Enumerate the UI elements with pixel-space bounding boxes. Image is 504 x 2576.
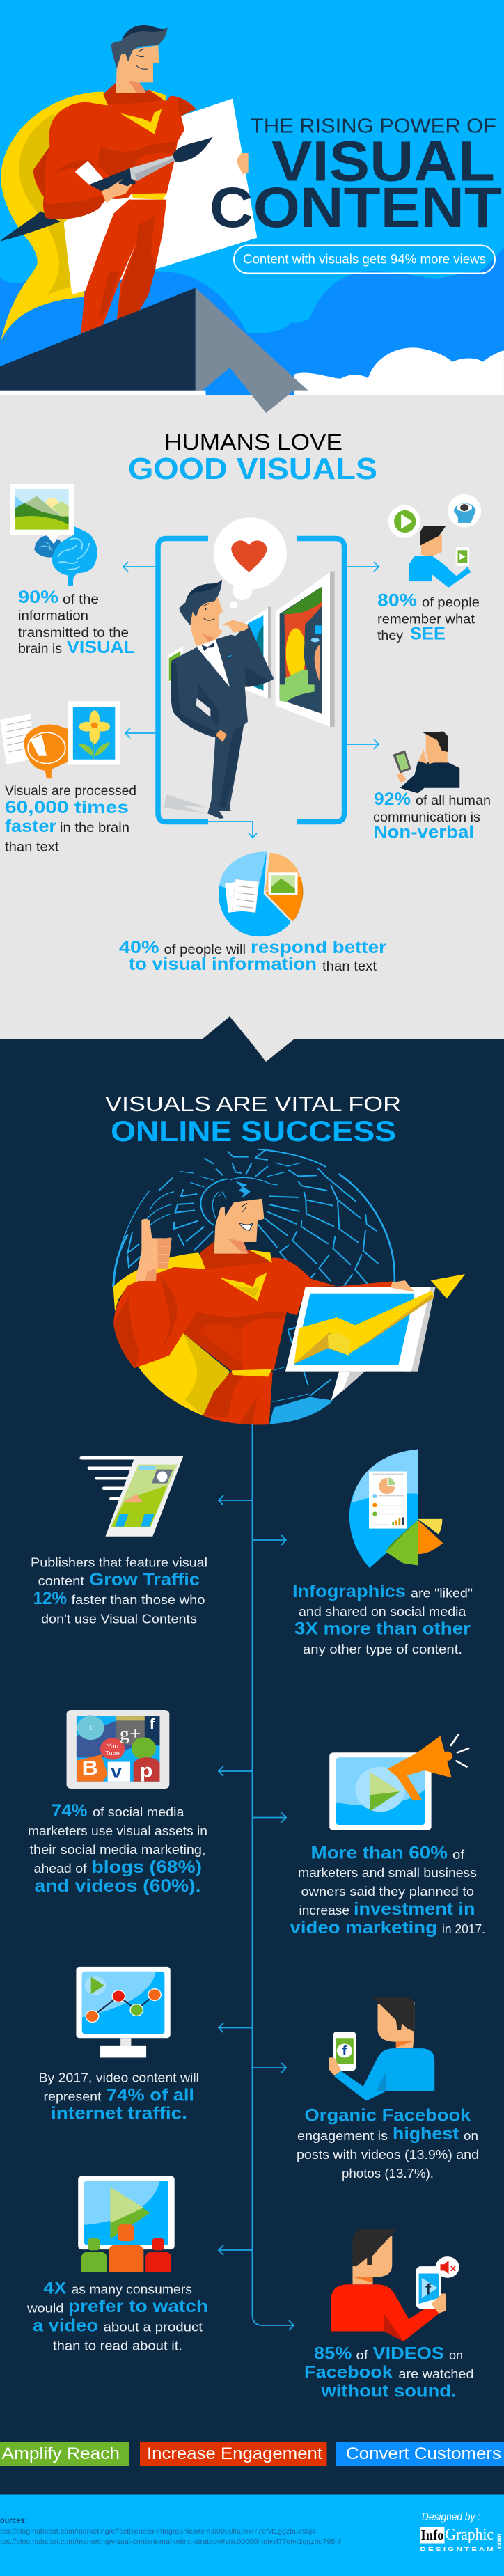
- text: 74% social media marketers: and videos (60%).: [35, 1876, 200, 1896]
- text: organic facebook engagement: Organic Facebook: [305, 2105, 471, 2125]
- title: THE RISING POWER OF: [251, 116, 496, 138]
- text: 90% visual: 90%: [18, 588, 58, 607]
- text: grow traffic: faster than those who: [71, 1592, 205, 1607]
- text: 60,000 times faster: Visuals are processed: [5, 784, 136, 799]
- callout: 94% more views pill: Content with visuals gets 94% more views: [243, 252, 486, 267]
- button: convert customers: Convert Customers: [346, 2444, 501, 2463]
- panel: hero background: [0, 0, 504, 397]
- icon: video screen with megaphone: [329, 1735, 468, 1830]
- text: more than 60% investment in video: of: [452, 1847, 465, 1862]
- icon: tablet with social media logos: Tube: [105, 1750, 120, 1757]
- belt: [131, 193, 166, 200]
- text: 74% of internet traffic: 74% of all: [107, 2086, 194, 2105]
- thumbs up: [135, 1219, 172, 1281]
- text: organic facebook engagement: engagement is: [297, 2128, 388, 2143]
- icon: audience watching video screen: [78, 2176, 175, 2272]
- icon: person with muted facebook video: x: [450, 2263, 456, 2273]
- growth arrow: [294, 1291, 434, 1364]
- wristband: [75, 161, 103, 185]
- text: grow traffic: Grow Traffic: [89, 1570, 200, 1589]
- text: 4x prefer to watch: 4X: [43, 2278, 67, 2298]
- icon: landscape picture and blue brain: [10, 484, 97, 586]
- text: 40% respond better: [119, 938, 386, 974]
- text: 40% respond better: to visual information: [129, 955, 317, 974]
- text: more than 60% investment in video: [290, 1844, 485, 1938]
- heading: visuals are vital for online success: VISUALS ARE VITAL FOR: [105, 1092, 401, 1116]
- text: 74% social media marketers: marketers use visual assets in: [28, 1823, 207, 1838]
- text: 92% non-verbal: [373, 790, 491, 842]
- text: infographics 3x: Infographics: [292, 1582, 406, 1601]
- text: 85% of videos without sound: [304, 2343, 473, 2401]
- title: VISUAL: [271, 129, 495, 194]
- text: 40% respond better: than text: [322, 959, 377, 974]
- text: organic facebook engagement: on: [464, 2128, 478, 2143]
- designer credit logo: D E S I G N T E A M: [420, 2547, 494, 2552]
- belt: [232, 1369, 272, 1376]
- icon: person with facebook phone: [329, 1997, 434, 2101]
- icon: flower picture, orange brain and document: [0, 701, 120, 778]
- designer credit logo: Designed by :: [422, 2511, 480, 2523]
- text: more than 60% investment in video: in 2017.: [442, 1922, 485, 1936]
- text: 74% of internet traffic: [39, 2071, 199, 2123]
- text: grow traffic: [31, 1555, 207, 1626]
- text: 40% respond better: respond better: [251, 938, 386, 957]
- text: 90% visual: information: [18, 608, 88, 624]
- hair: [111, 25, 168, 68]
- text: 4x prefer to watch: as many consumers: [71, 2282, 192, 2296]
- cape: [1, 92, 116, 341]
- hair: [216, 1181, 262, 1216]
- text: 60,000 times faster: 60,000 times: [5, 798, 129, 817]
- text: 74% social media marketers: ahead of: [33, 1861, 87, 1876]
- text: 60,000 times faster: faster: [5, 817, 56, 836]
- text: more than 60% investment in video: marketers and small business: [298, 1865, 477, 1880]
- text: 85% of videos without sound: without sound.: [320, 2381, 457, 2401]
- text: 92% non-verbal: communication is: [373, 810, 480, 825]
- icon: person with facebook phone: f: [342, 2044, 347, 2059]
- blue frame around gallery visitor: [158, 539, 344, 822]
- text: organic facebook engagement: photos (13.7%).: [342, 2166, 434, 2181]
- text: 4x prefer to watch: [26, 2278, 208, 2353]
- icon: tablet with social media logos: B: [82, 1757, 98, 1780]
- text: organic facebook engagement: highest: [393, 2124, 459, 2144]
- superhero giving thumbs up: [113, 1181, 336, 1424]
- text: 74% social media marketers: blogs (68%): [92, 1858, 202, 1877]
- text: 80% see: [377, 590, 480, 643]
- icon: person looking at tablet: [393, 732, 459, 793]
- chest emblem: [219, 1273, 267, 1301]
- button: increase engagement: [140, 2442, 327, 2466]
- text: 80% see: remember what: [377, 613, 475, 627]
- text: 74% social media marketers: of social media: [93, 1805, 184, 1819]
- suit: [33, 82, 196, 219]
- panel: footer: [0, 2494, 504, 2576]
- chest emblem: [120, 109, 162, 134]
- designer credit logo: [420, 2511, 503, 2552]
- text: 90% visual: of the: [63, 592, 99, 607]
- sources: tps://blog.hubspot.com/marketing/effectiveness-infographics#sm.00000lnuivxl77efvt1ggzbu795j4: [0, 2527, 316, 2536]
- illustration: man in tuxedo admiring paintings: [164, 572, 335, 819]
- icon: person with muted facebook video: f: [425, 2281, 431, 2298]
- text: 4x prefer to watch: would: [26, 2300, 64, 2316]
- panel: navy online success section with chevron: [0, 1016, 504, 2494]
- sources: [0, 2515, 341, 2546]
- sources: tps://blog.hubspot.com/marketing/visual-content-marketing-strategy#sm.00000lnuivxl77efvt1ggzbu795j4: [0, 2538, 341, 2546]
- head: [190, 597, 223, 646]
- icon: tablet with social media logos: v: [111, 1762, 122, 1782]
- text: infographics 3x: 3X more than other: [294, 1619, 471, 1639]
- brush and hands: [89, 168, 136, 191]
- icon: thought bubble with heart: [214, 517, 287, 609]
- text: 60,000 times faster: than text: [5, 840, 59, 855]
- icon: tablet with social media logos: t: [90, 1724, 92, 1732]
- globe behind superhero: [113, 1149, 395, 1424]
- heading: humans love good visuals: HUMANS LOVE: [164, 430, 342, 455]
- floor shadow: [164, 794, 207, 814]
- text: 4x prefer to watch: prefer to watch: [68, 2297, 208, 2316]
- text: infographics 3x: [292, 1582, 473, 1656]
- button: amplify reach: Amplify Reach: [1, 2444, 120, 2463]
- suit: [171, 624, 274, 738]
- text: 74% of internet traffic: internet traffic.: [51, 2104, 187, 2123]
- smile: [239, 1223, 253, 1230]
- text: 40% respond better: 40%: [119, 938, 159, 957]
- chart: pie chart with document and picture: [219, 851, 303, 936]
- text: more than 60% investment in video: owners said they planned to: [301, 1884, 474, 1899]
- text: 80% see: they: [377, 629, 404, 643]
- text: 85% of videos without sound: Facebook: [304, 2363, 393, 2382]
- painting middle: [268, 607, 271, 698]
- cape: [113, 1252, 209, 1311]
- suit: [113, 1242, 336, 1370]
- callout: 94% more views pill: [234, 245, 495, 273]
- text: more than 60% investment in video: More than 60%: [310, 1844, 448, 1863]
- chart board with rising arrow: [285, 1274, 465, 1401]
- text: 74% social media marketers: their social media marketing,: [29, 1842, 206, 1857]
- text: 90% visual: VISUAL: [67, 638, 135, 657]
- text: grow traffic: Publishers that feature visual: [31, 1555, 207, 1569]
- title: [210, 116, 501, 239]
- icon: person with muted facebook video: [331, 2229, 459, 2341]
- heading: visuals are vital for online success: ONLINE SUCCESS: [111, 1115, 396, 1147]
- face: [214, 1199, 264, 1254]
- painting small: [168, 646, 183, 682]
- text: 92% non-verbal: of all human: [416, 794, 491, 808]
- text: 74% of internet traffic: By 2017, video content will: [39, 2071, 199, 2084]
- text: 90% visual: brain is: [18, 642, 62, 657]
- text: 85% of videos without sound: are watched: [398, 2366, 473, 2381]
- painting large: [330, 572, 335, 727]
- text: grow traffic: don't use Visual Contents: [41, 1611, 197, 1626]
- designer credit logo: .com: [496, 2534, 503, 2551]
- text: 40% respond better: of people will: [164, 943, 246, 957]
- text: 85% of videos without sound: VIDEOS: [373, 2343, 444, 2363]
- roof with chevron arrow pointing down: [0, 288, 308, 413]
- text: 74% of internet traffic: represent: [43, 2089, 102, 2104]
- title: CONTENT: [210, 176, 501, 239]
- text: 92% non-verbal: 92%: [374, 790, 411, 809]
- text: infographics 3x: any other type of content.: [303, 1642, 462, 1656]
- trousers and shoes: [207, 725, 244, 819]
- icon: person with phone, play and eye bubbles: [388, 494, 481, 588]
- icon: tablet with social media logos: p: [140, 1761, 152, 1782]
- clouds: white foreground: [0, 347, 504, 395]
- heading: visuals are vital for online success: [105, 1092, 401, 1147]
- icon: speeding web page tablet: [80, 1456, 183, 1537]
- text: grow traffic: 12%: [33, 1589, 67, 1608]
- text: 85% of videos without sound: on: [449, 2348, 463, 2362]
- timeline with branching arrows: [219, 1424, 294, 2330]
- text: 80% see: SEE: [410, 624, 446, 643]
- text: infographics 3x: are "liked": [411, 1586, 473, 1600]
- button: increase engagement: Increase Engagement: [147, 2444, 322, 2463]
- designer credit logo: Info: [420, 2527, 444, 2543]
- text: 80% see: of people: [422, 596, 480, 610]
- text: grow traffic: content: [38, 1573, 84, 1588]
- text: 92% non-verbal: Non-verbal: [373, 823, 474, 842]
- text: 4x prefer to watch: about a product: [103, 2320, 203, 2334]
- icon: infographic document on pie shapes: [349, 1450, 443, 1568]
- text: 74% social media marketers: [28, 1801, 207, 1896]
- text: organic facebook engagement: [297, 2105, 479, 2181]
- button: convert customers: [336, 2442, 504, 2466]
- text: more than 60% investment in video: investment in: [354, 1899, 475, 1919]
- heading: humans love good visuals: [128, 430, 377, 486]
- text: 90% visual: transmitted to the: [18, 626, 129, 641]
- icon: tablet with social media logos: f: [150, 1715, 155, 1732]
- panel: light grey section background: [0, 395, 504, 1039]
- button: amplify reach: [0, 2442, 129, 2466]
- text: 80% see: 80%: [377, 590, 417, 610]
- text: organic facebook engagement: posts with videos (13.9%) and: [297, 2147, 479, 2162]
- text: more than 60% investment in video: increase: [299, 1903, 349, 1917]
- designer credit logo: Graphic: [446, 2526, 494, 2544]
- cape tip: [0, 211, 61, 242]
- canvas: [64, 99, 257, 294]
- text: 60,000 times faster: [5, 784, 136, 855]
- neck and head: [116, 68, 146, 93]
- text: more than 60% investment in video: video marketing: [290, 1918, 437, 1938]
- icon: tablet with social media logos: [67, 1710, 169, 1789]
- text: 74% social media marketers: 74%: [52, 1801, 88, 1821]
- text: 85% of videos without sound: of: [356, 2348, 368, 2362]
- text: infographics 3x: and shared on social media: [299, 1604, 466, 1619]
- icon: monitor with line chart: [76, 1967, 171, 2057]
- text: 4x prefer to watch: than to read about it.: [53, 2338, 182, 2353]
- hero superhero with blank canvas and paint brush: [0, 25, 257, 341]
- icon: tablet with social media logos: You: [107, 1743, 118, 1750]
- heading: humans love good visuals: GOOD VISUALS: [128, 452, 377, 486]
- text: 4x prefer to watch: a video: [33, 2316, 98, 2335]
- icon: tablet with social media logos: g+: [120, 1724, 141, 1743]
- text: 90% visual: [18, 588, 135, 657]
- arrows from frame to facts: [123, 562, 379, 838]
- text: 85% of videos without sound: 85%: [314, 2343, 352, 2363]
- text: 60,000 times faster: in the brain: [60, 821, 129, 835]
- sources: ources:: [0, 2515, 27, 2525]
- hand on chin: [221, 620, 249, 632]
